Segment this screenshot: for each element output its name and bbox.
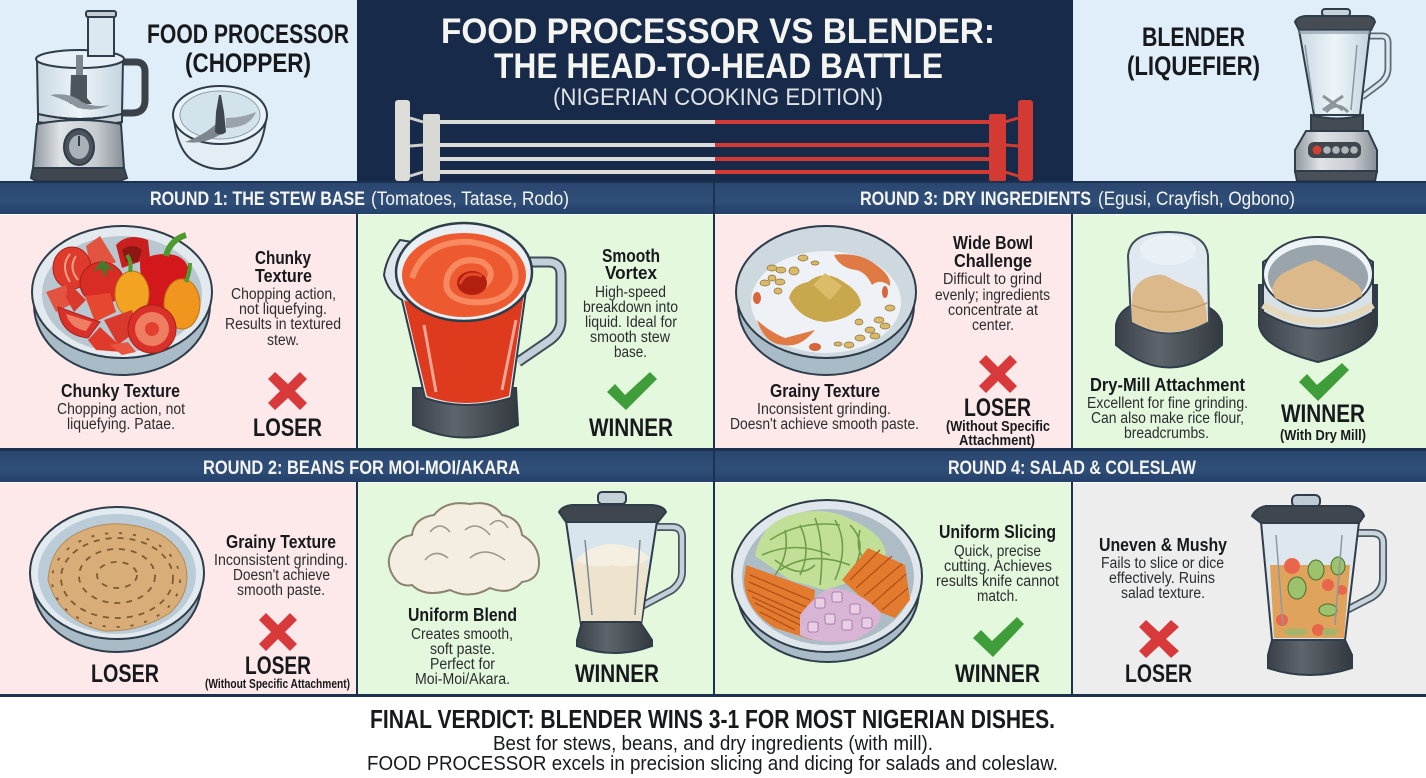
label: loser without specific attachment bbox=[205, 652, 350, 691]
round 1 bar: (Tomatoes, Tatase, Rodo) bbox=[371, 189, 569, 210]
icon: green check bbox=[973, 617, 1024, 657]
text: smooth vortex description: High-speed bbox=[595, 284, 666, 301]
title: FOOD PROCESSOR VS BLENDER: bbox=[441, 12, 995, 51]
text: uniform blend description bbox=[408, 605, 517, 688]
text: smooth vortex description: base. bbox=[614, 344, 647, 361]
icon: red cross bbox=[1139, 620, 1179, 658]
label: winner: WINNER bbox=[955, 660, 1040, 688]
round 2 bar: ROUND 2: BEANS FOR MOI-MOI/AKARA bbox=[203, 458, 520, 479]
text: grainy texture description: Doesn't achieve bbox=[233, 567, 330, 584]
text: wide bowl challenge description bbox=[935, 233, 1050, 334]
text: grainy texture caption: Inconsistent grinding. bbox=[757, 401, 891, 418]
label: winner with dry mill: (With Dry Mill) bbox=[1280, 427, 1366, 444]
final verdict: FINAL VERDICT: BLENDER WINS 3-1 FOR MOST NIGERIAN DISHES. bbox=[370, 704, 1055, 734]
round 1 bar bbox=[0, 183, 713, 214]
icon: food processor bbox=[31, 11, 145, 181]
text: uniform blend description: soft paste. bbox=[430, 641, 495, 658]
text: wide bowl challenge description: evenly; ingredients bbox=[935, 287, 1050, 304]
label: loser: LOSER bbox=[253, 414, 322, 442]
header panel: blender bbox=[1073, 0, 1426, 182]
icon: bowl of dry ingredients bbox=[736, 226, 916, 375]
label: winner: WINNER bbox=[589, 414, 673, 442]
heading: blender bbox=[1127, 22, 1260, 81]
label: winner with dry mill: WINNER bbox=[1281, 400, 1365, 428]
heading: food processor bbox=[147, 19, 349, 78]
text: uniform slicing description: match. bbox=[977, 588, 1018, 605]
icon: blender with mushy salad bbox=[1252, 495, 1383, 675]
label: loser without specific attachment: Attachment) bbox=[959, 432, 1035, 449]
heading: food processor: FOOD PROCESSOR bbox=[147, 19, 349, 49]
text: chunky texture caption: Chopping action, not bbox=[57, 401, 186, 418]
text: smooth vortex description bbox=[583, 246, 678, 361]
text: grainy texture caption: Doesn't achieve smooth paste. bbox=[730, 416, 919, 433]
label: loser without specific attachment: (Without Specific Attachment) bbox=[205, 677, 350, 691]
icon: dry mill open bbox=[1259, 237, 1377, 362]
label: loser without specific attachment: LOSER bbox=[964, 394, 1031, 422]
round 4 bar bbox=[715, 451, 1426, 482]
text: dry-mill attachment bbox=[1087, 375, 1248, 442]
text: chunky texture caption: liquefying. Patae. bbox=[67, 416, 175, 433]
text: wide bowl challenge description: concentrate at bbox=[948, 302, 1039, 319]
text: chunky texture description: stew. bbox=[267, 332, 299, 349]
text: dry-mill attachment: Excellent for fine grinding. bbox=[1087, 395, 1248, 412]
label: loser without specific attachment bbox=[946, 394, 1050, 449]
label: loser under bowl: LOSER bbox=[91, 660, 159, 688]
text: chunky texture description: Texture bbox=[255, 266, 312, 286]
text: uniform slicing description bbox=[936, 522, 1060, 605]
text: chunky texture caption: Chunky Texture bbox=[61, 381, 180, 401]
round 3 bar bbox=[715, 183, 1426, 214]
icon: bowl of grainy bean paste bbox=[30, 507, 204, 652]
label: winner: WINNER bbox=[575, 660, 659, 688]
text: uniform slicing description: results knife cannot bbox=[936, 573, 1060, 590]
text: grainy texture caption bbox=[730, 381, 919, 433]
text: uneven and mushy description: effectively. Ruins bbox=[1109, 570, 1215, 587]
text: uniform slicing description: cutting. Achieves bbox=[944, 558, 1052, 575]
panel: round 1 food processor bbox=[0, 215, 356, 448]
text: uniform blend description: Perfect for bbox=[430, 656, 495, 673]
text: grainy texture description: smooth paste. bbox=[237, 582, 325, 599]
icon: paste cloud bbox=[389, 503, 539, 595]
text: uneven and mushy description: Fails to slice or dice bbox=[1101, 555, 1224, 572]
text: chunky texture description: not liquefying. bbox=[239, 301, 327, 318]
text: uneven and mushy description: Uneven & Mushy bbox=[1099, 535, 1227, 555]
icon: chopper bowl and blade bbox=[173, 86, 267, 169]
text: dry-mill attachment: breadcrumbs. bbox=[1124, 425, 1209, 442]
text: wide bowl challenge description: Challenge bbox=[954, 251, 1032, 271]
round 4 bar: ROUND 4: SALAD & COLESLAW bbox=[948, 458, 1196, 479]
panel: round 3 blender bbox=[1073, 215, 1426, 448]
text: wide bowl challenge description: Difficult to grind bbox=[943, 271, 1042, 288]
icon: boxing ring bbox=[395, 100, 1033, 181]
icon: red cross bbox=[259, 613, 297, 651]
dark divider lines bbox=[0, 181, 1426, 697]
icon: green check bbox=[1299, 363, 1349, 401]
text: uniform slicing description: Quick, precise bbox=[954, 543, 1041, 560]
header panel: title bbox=[357, 0, 1073, 182]
text: chunky texture description: Chopping action, bbox=[231, 286, 336, 303]
title bbox=[441, 12, 995, 111]
text: chunky texture description bbox=[225, 248, 341, 349]
icon: blender with bean paste bbox=[559, 492, 682, 653]
title: (NIGERIAN COOKING EDITION) bbox=[553, 84, 883, 111]
icon: bowl of sliced salad bbox=[732, 500, 922, 662]
final verdict: FOOD PROCESSOR excels in precision slicing and dicing for salads and coleslaw. bbox=[367, 753, 1058, 775]
text: grainy texture description bbox=[214, 532, 348, 599]
heading: food processor: (CHOPPER) bbox=[185, 48, 311, 78]
heading: blender: BLENDER bbox=[1142, 22, 1245, 52]
final verdict: Best for stews, beans, and dry ingredients (with mill). bbox=[493, 733, 933, 755]
round 3 bar: (Egusi, Crayfish, Ogbono) bbox=[1098, 189, 1295, 210]
text: smooth vortex description: smooth stew bbox=[590, 329, 671, 346]
text: dry-mill attachment: Dry-Mill Attachment bbox=[1090, 375, 1245, 395]
text: uniform slicing description: Uniform Slicing bbox=[939, 522, 1056, 542]
panel: round 2 food processor bbox=[0, 483, 356, 694]
text: smooth vortex description: Vortex bbox=[605, 263, 657, 283]
text: dry-mill attachment: Can also make rice flour, bbox=[1091, 410, 1244, 427]
round 2 bar bbox=[0, 451, 713, 482]
final verdict bbox=[367, 704, 1058, 775]
text: uneven and mushy description: salad texture. bbox=[1121, 585, 1205, 602]
text: wide bowl challenge description: center. bbox=[972, 317, 1014, 334]
icon: red cross bbox=[979, 355, 1017, 393]
text: smooth vortex description: Smooth bbox=[602, 246, 660, 266]
text: chunky texture caption bbox=[57, 381, 186, 433]
text: chunky texture description: Results in textured bbox=[225, 316, 341, 333]
text: smooth vortex description: breakdown into bbox=[583, 299, 678, 316]
label: loser: LOSER bbox=[1125, 660, 1192, 688]
text: grainy texture description: Inconsistent grinding. bbox=[214, 552, 348, 569]
text: uniform blend description: Moi-Moi/Akara. bbox=[415, 671, 510, 688]
panel: round 4 blender bbox=[1073, 483, 1426, 694]
icon: dry mill closed bbox=[1116, 232, 1222, 368]
icon: red cross bbox=[268, 372, 307, 410]
icon: bowl of chopped tomatoes and peppers bbox=[32, 226, 212, 375]
round 3 bar: ROUND 3: DRY INGREDIENTS bbox=[860, 189, 1091, 210]
text: uneven and mushy description bbox=[1099, 535, 1227, 602]
title: THE HEAD-TO-HEAD BATTLE bbox=[494, 47, 943, 86]
panel: round 3 food processor bbox=[715, 215, 1071, 449]
label: loser without specific attachment: LOSER bbox=[245, 652, 311, 680]
text: chunky texture description: Chunky bbox=[255, 248, 311, 268]
round 1 bar: ROUND 1: THE STEW BASE bbox=[150, 189, 365, 210]
label: loser without specific attachment: (Without Specific bbox=[946, 418, 1050, 435]
icon: blender jug with red vortex bbox=[384, 223, 561, 438]
panel: round 4 food processor bbox=[715, 483, 1071, 694]
header panel: food processor bbox=[0, 0, 357, 182]
text: uniform blend description: Uniform Blend bbox=[408, 605, 517, 625]
panel: round 1 blender bbox=[358, 215, 713, 448]
label: winner with dry mill bbox=[1280, 400, 1366, 444]
text: smooth vortex description: liquid. Ideal for bbox=[585, 314, 677, 331]
heading: blender: (LIQUEFIER) bbox=[1127, 51, 1260, 81]
icon: blender bbox=[1295, 9, 1388, 181]
text: uniform blend description: Creates smooth, bbox=[411, 626, 513, 643]
text: wide bowl challenge description: Wide Bowl bbox=[953, 233, 1033, 253]
panel: round 2 blender bbox=[358, 483, 713, 694]
text: grainy texture caption: Grainy Texture bbox=[770, 381, 880, 401]
text: grainy texture description: Grainy Texture bbox=[226, 532, 336, 552]
icon: green check bbox=[607, 372, 657, 410]
